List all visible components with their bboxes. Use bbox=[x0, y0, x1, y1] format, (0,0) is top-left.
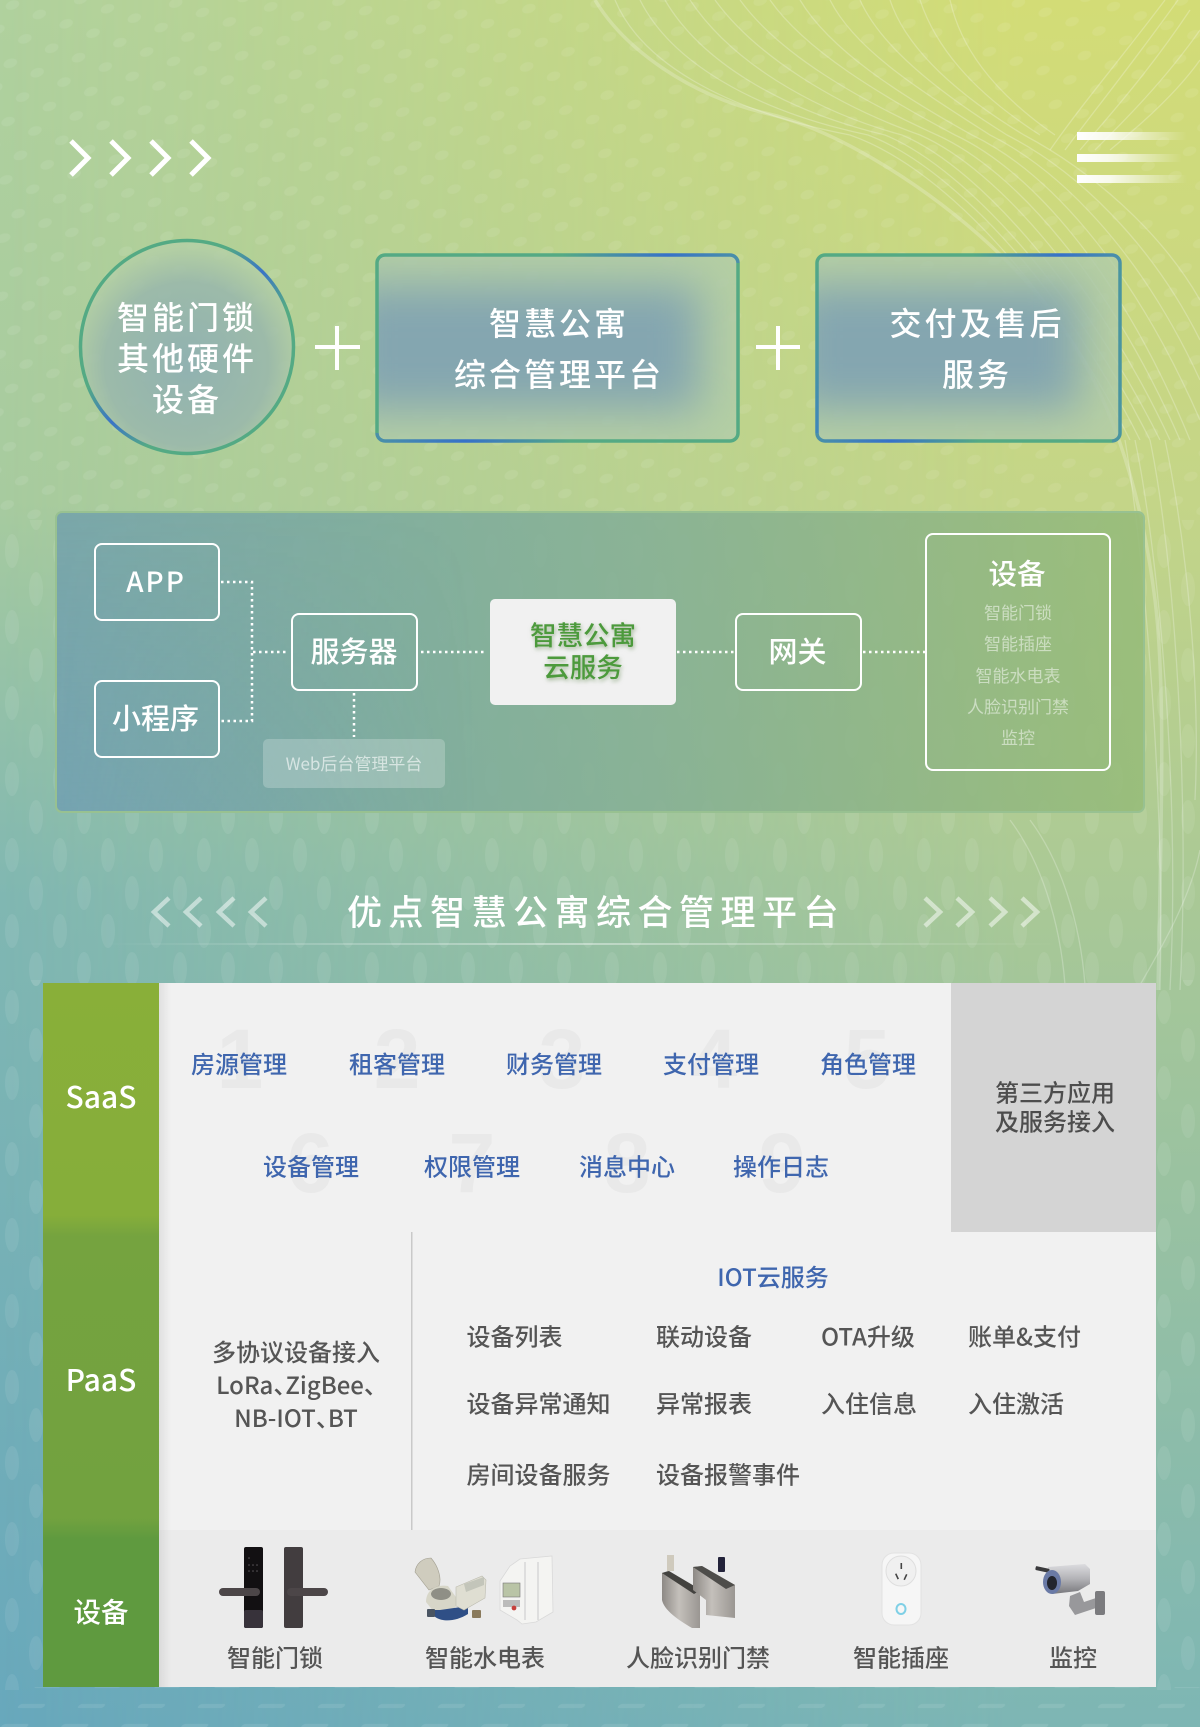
node: cloud service: 智慧公寓 bbox=[530, 614, 636, 653]
chevrons: top left bbox=[71, 141, 208, 175]
row: SaaS modules: 角色管理 bbox=[820, 1045, 916, 1080]
node: device list bbox=[926, 534, 1110, 770]
heading: platform advantages: 优点智慧公寓综合管理平台 bbox=[347, 885, 845, 936]
cell: IoT cloud services: 入住激活 bbox=[968, 1384, 1064, 1420]
row: SaaS modules: 租客管理 bbox=[349, 1045, 445, 1080]
circle: smart lock and hardware: 智能门锁 bbox=[117, 293, 257, 339]
node: device list: 人脸识别门禁 bbox=[967, 693, 1069, 718]
device labels: 人脸识别门禁 bbox=[626, 1638, 770, 1674]
row: SaaS modules: 消息中心 bbox=[579, 1148, 675, 1182]
cell: IoT cloud services: 房间设备服务 bbox=[466, 1456, 610, 1490]
row: device products bbox=[159, 1530, 1156, 1687]
cell: IoT cloud services: 入住信息 bbox=[821, 1384, 917, 1420]
circle: smart lock and hardware: 设备 bbox=[152, 375, 222, 421]
cell: third-party access bbox=[951, 983, 1156, 1232]
node: web admin platform: Web后台管理平台 bbox=[286, 750, 422, 775]
row: SaaS modules: 2 bbox=[374, 1012, 420, 1106]
heading chevrons left bbox=[154, 898, 266, 926]
row: SaaS modules: 6 bbox=[287, 1116, 333, 1210]
node: device list: 智能门锁 bbox=[984, 599, 1052, 624]
node: mini program: 小程序 bbox=[112, 696, 199, 738]
device labels: 智能插座 bbox=[853, 1638, 949, 1674]
node: gateway: 网关 bbox=[768, 629, 827, 671]
layer labels column: 设备 bbox=[74, 1590, 128, 1630]
box: smart apartment platform bbox=[345, 255, 738, 441]
row: SaaS modules: 7 bbox=[449, 1116, 495, 1210]
node: web admin platform bbox=[263, 739, 445, 788]
cell: third-party access: 及服务接入 bbox=[995, 1102, 1115, 1138]
device labels: 监控 bbox=[1049, 1638, 1097, 1674]
node: device list: 监控 bbox=[1001, 724, 1035, 749]
node: APP bbox=[95, 544, 219, 620]
icon: water and electricity meters bbox=[415, 1556, 553, 1624]
circle: smart lock and hardware: 其他硬件 bbox=[117, 334, 257, 380]
node: device list: 智能插座 bbox=[984, 630, 1052, 655]
device labels: 智能水电表 bbox=[425, 1638, 545, 1674]
device labels bbox=[227, 1638, 1097, 1674]
node: mini program bbox=[95, 681, 219, 757]
heading chevrons right bbox=[925, 898, 1037, 926]
node: cloud service bbox=[490, 599, 676, 705]
box: delivery and after-sales service bbox=[790, 255, 1120, 441]
box: smart apartment platform: 综合管理平台 bbox=[454, 350, 664, 396]
cell: IoT cloud services: 异常报表 bbox=[656, 1384, 752, 1420]
cell: protocols bbox=[212, 1333, 380, 1434]
cell: IoT cloud services: 联动设备 bbox=[656, 1318, 752, 1352]
node: server: 服务器 bbox=[310, 629, 398, 671]
row: SaaS modules: 3 bbox=[539, 1012, 585, 1106]
layer labels column bbox=[43, 983, 171, 1687]
node: gateway bbox=[736, 614, 861, 690]
row: SaaS modules: 房源管理 bbox=[191, 1045, 287, 1080]
row: SaaS modules: 4 bbox=[691, 1012, 738, 1106]
cell: protocols: 多协议设备接入 bbox=[212, 1333, 380, 1368]
cell: IoT cloud services bbox=[466, 1258, 1081, 1490]
cell: protocols: LoRa、ZigBee、 bbox=[216, 1366, 376, 1401]
node: cloud service: 云服务 bbox=[543, 646, 623, 685]
box: delivery and after-sales service: 服务 bbox=[942, 350, 1012, 396]
layer labels column: SaaS bbox=[66, 1073, 136, 1117]
node: device list: 设备 bbox=[988, 552, 1046, 593]
plus sign 2 bbox=[756, 326, 800, 370]
row: SaaS modules: 9 bbox=[759, 1116, 805, 1210]
icon: face recognition turnstile bbox=[662, 1555, 735, 1628]
node: device list: 智能水电表 bbox=[976, 662, 1060, 687]
cell: third-party access: 第三方应用 bbox=[995, 1074, 1115, 1108]
node: APP: APP bbox=[126, 561, 186, 601]
row: SaaS modules: 1 bbox=[217, 1012, 263, 1106]
plus sign 1 bbox=[315, 326, 360, 370]
box: delivery and after-sales service: 交付及售后 bbox=[889, 299, 1065, 345]
icon: menu bars bbox=[1077, 132, 1187, 183]
row: SaaS modules: 操作日志 bbox=[733, 1148, 829, 1182]
icon: security camera bbox=[1035, 1564, 1105, 1615]
cell: IoT cloud services: 账单&支付 bbox=[968, 1318, 1081, 1352]
row: SaaS modules: 支付管理 bbox=[663, 1045, 759, 1080]
row: SaaS modules: 8 bbox=[604, 1116, 650, 1210]
row: SaaS modules: 权限管理 bbox=[424, 1148, 520, 1182]
cell: IoT cloud services: 设备报警事件 bbox=[656, 1456, 800, 1490]
device labels: 智能门锁 bbox=[227, 1638, 323, 1674]
table: platform layers bbox=[43, 983, 1156, 1687]
cell: IoT cloud services: OTA升级 bbox=[821, 1318, 915, 1352]
row: SaaS modules: 5 bbox=[844, 1012, 890, 1106]
panel: architecture diagram bbox=[56, 512, 1144, 812]
cell: IoT cloud services: IOT云服务 bbox=[717, 1258, 829, 1293]
cell: IoT cloud services: 设备列表 bbox=[466, 1318, 562, 1352]
layer labels column: PaaS bbox=[66, 1356, 136, 1400]
icon: smart socket bbox=[882, 1553, 921, 1625]
row: SaaS modules: 财务管理 bbox=[506, 1045, 602, 1080]
cell: protocols: NB-IOT、BT bbox=[234, 1399, 358, 1434]
dotted connectors bbox=[221, 582, 925, 737]
box: smart apartment platform: 智慧公寓 bbox=[489, 299, 629, 345]
circle: smart lock and hardware bbox=[80, 240, 294, 454]
node: server bbox=[292, 614, 417, 690]
row: SaaS modules: 设备管理 bbox=[263, 1148, 359, 1182]
icon: smart door lock bbox=[219, 1547, 328, 1628]
cell: IoT cloud services: 设备异常通知 bbox=[466, 1384, 610, 1420]
row: SaaS modules bbox=[191, 1012, 916, 1210]
